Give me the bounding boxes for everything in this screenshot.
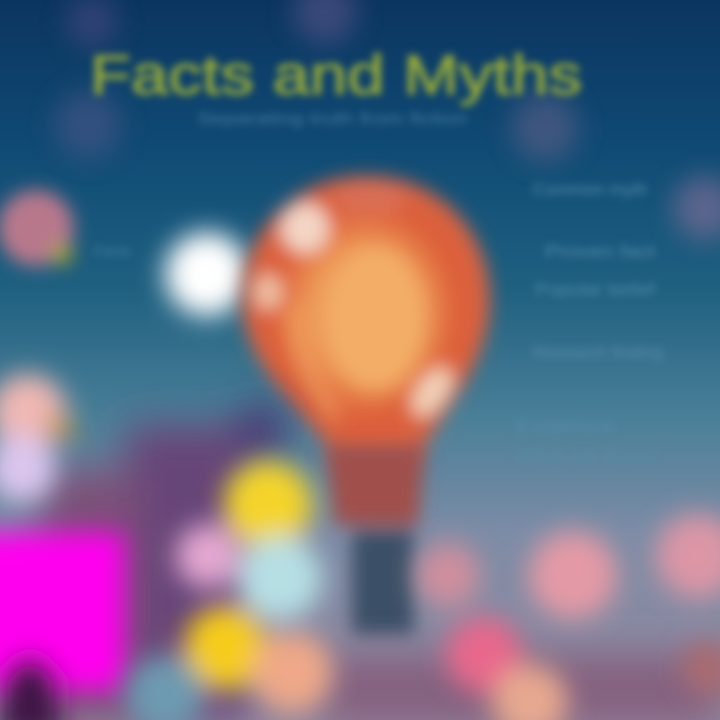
balloon basket [325,445,425,635]
list item 5: Evidence [515,417,615,436]
decorative top bubbles [54,0,720,240]
list item 2: Proven fact [545,242,655,261]
list item 4: Research finding [533,343,663,362]
left pink bubble [0,190,74,266]
list item 3: Popular belief [535,280,655,299]
left caption: Facts [94,243,130,260]
balloon [242,176,490,635]
subtitle: Separating truth from fiction [197,109,467,128]
list item 6: What we know [515,447,656,466]
balloon envelope [242,176,490,460]
white moon glow [165,232,249,316]
right text list [515,180,663,466]
central colour bubbles [125,461,332,720]
city silhouette [40,404,720,720]
magenta panel [0,532,125,720]
left stacked bubbles [0,374,74,502]
right pink bubbles [416,514,720,720]
list item 1: Common myth [532,180,648,199]
title: Facts and Myths [90,43,582,106]
